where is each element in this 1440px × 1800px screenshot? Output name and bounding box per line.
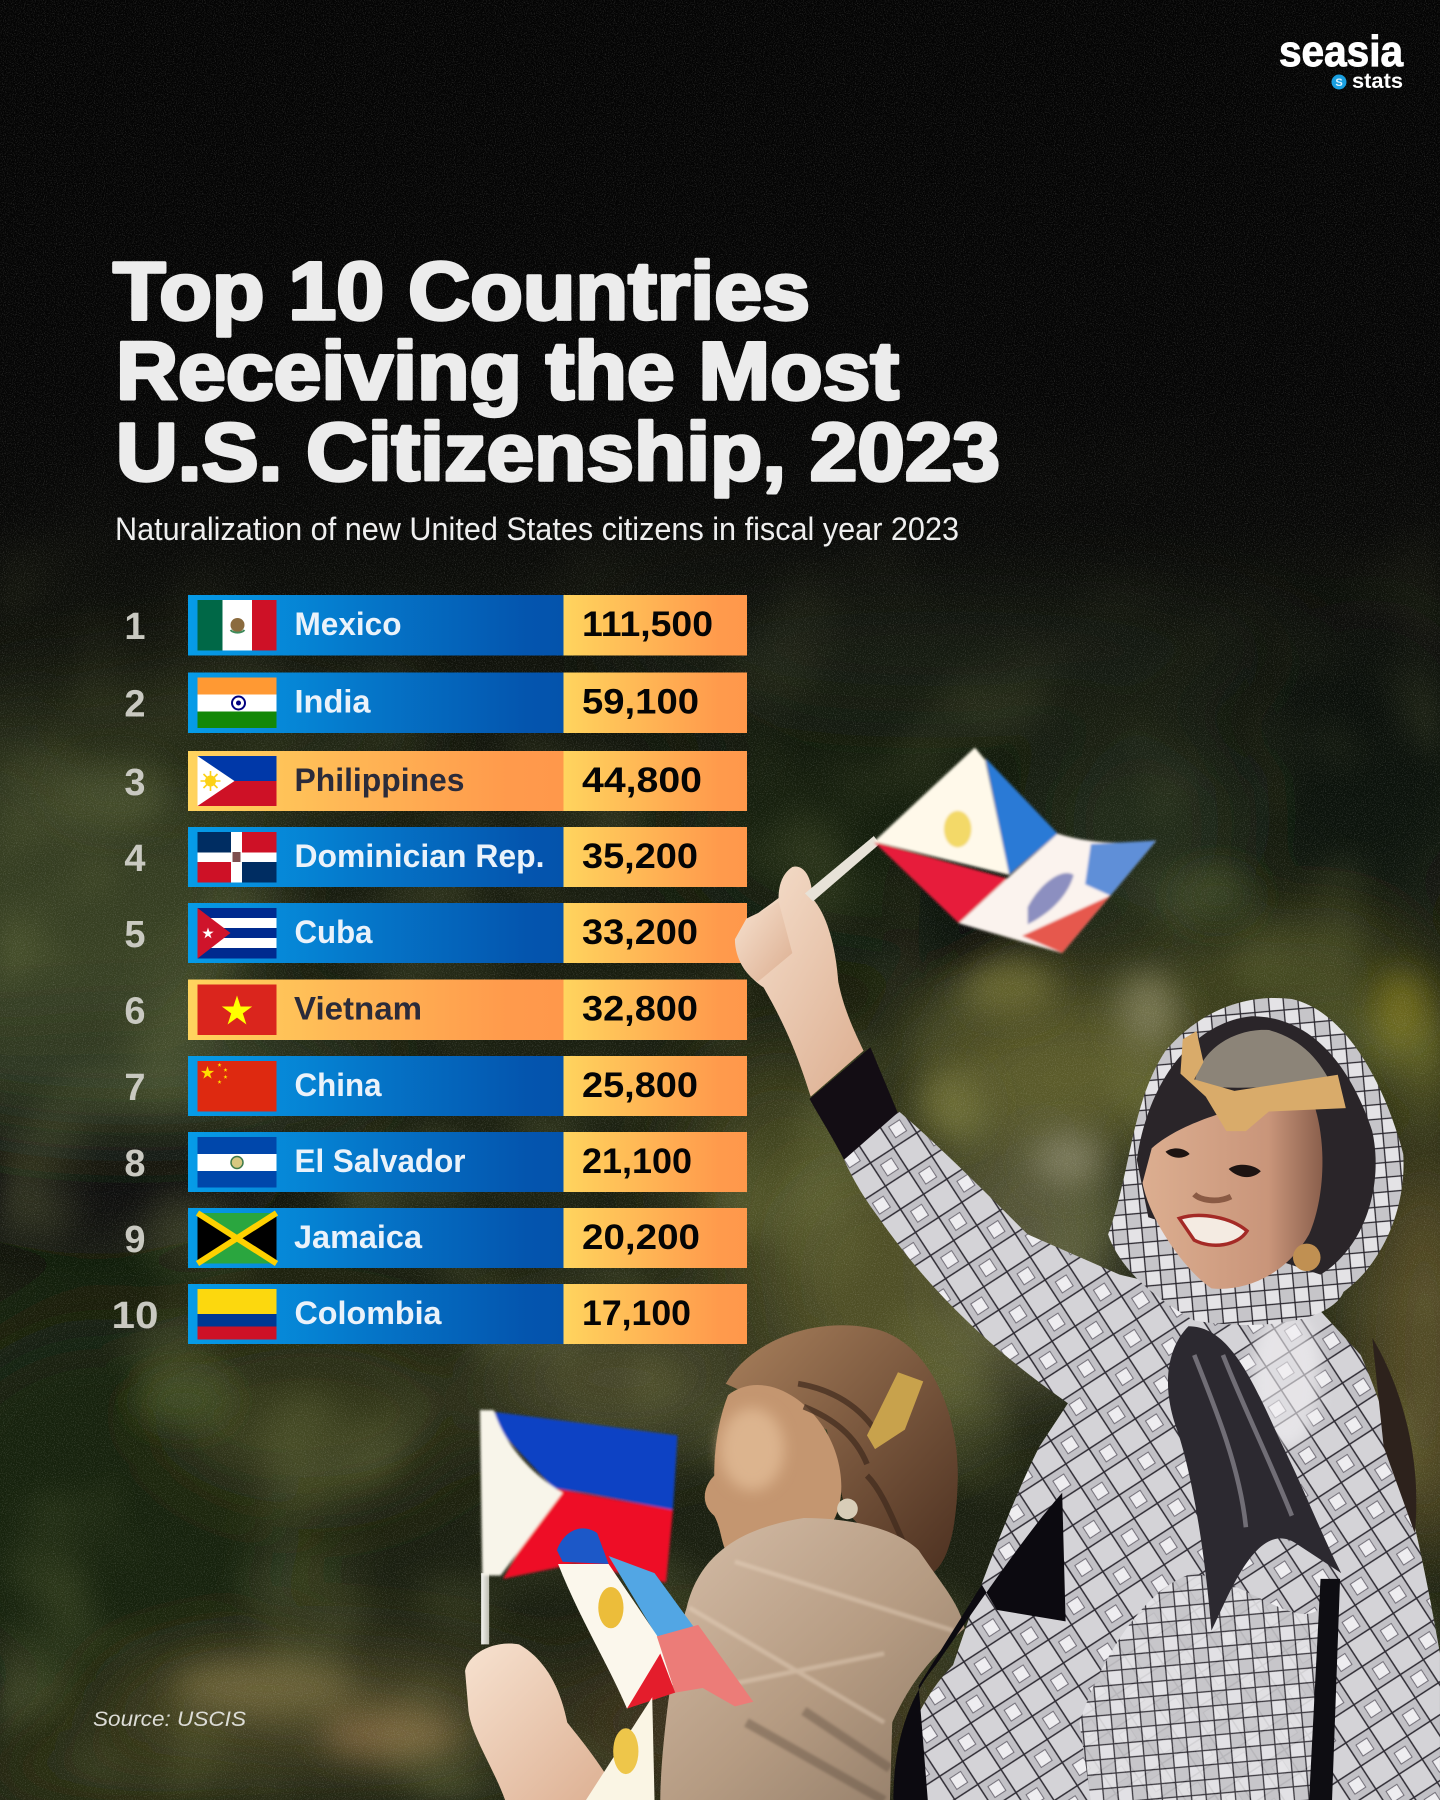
- row 6: Vietnam: [124, 980, 747, 1040]
- flag: Philippines: [198, 756, 276, 806]
- flag: Vietnam: [198, 984, 276, 1035]
- row 7: China: China: [294, 1067, 382, 1103]
- row 8: El Salvador: 8: [124, 1143, 146, 1185]
- row 7: China: 7: [124, 1067, 146, 1109]
- dress: [896, 1275, 1440, 1800]
- hair behind shoulder: [1372, 1338, 1416, 1533]
- row 7: China: 25,800: [582, 1066, 698, 1105]
- row 4: Dominican Rep.: 35,200: [582, 837, 698, 876]
- flag: El Salvador: [198, 1137, 276, 1188]
- row 2: India: India: [294, 684, 371, 720]
- row 6: Vietnam: Vietnam: [294, 990, 422, 1026]
- title: U.S. Citizenship, 2023: [116, 407, 1000, 498]
- logo: seasia stats: seasia: [1279, 27, 1403, 76]
- shawl: [660, 1518, 965, 1800]
- row 3: Philippines: [124, 751, 747, 811]
- row 5: Cuba: [124, 903, 747, 963]
- flag pole: [805, 836, 880, 901]
- face: [1143, 1100, 1322, 1289]
- dress light highlights: [1252, 1309, 1321, 1447]
- photo: foreground figures with flags: [465, 748, 1440, 1800]
- smile: [1179, 1215, 1247, 1245]
- Philippine flag, waved: [874, 748, 1156, 953]
- row 4: Dominican Rep.: 4: [124, 838, 146, 880]
- row 5: Cuba: Cuba: [294, 914, 373, 950]
- black cuff: [810, 1047, 899, 1160]
- row 2: India: [124, 672, 747, 733]
- flag: Mexico: [198, 600, 276, 650]
- title: [113, 246, 1000, 498]
- flag: Jamaica: [198, 1213, 276, 1264]
- row 4: Dominican Rep.: Dominician Rep.: [294, 838, 544, 874]
- eyes: [1166, 1148, 1261, 1177]
- photo: woman holding small flags, rear: [465, 1325, 965, 1800]
- row 10: Colombia: Colombia: [294, 1295, 442, 1331]
- row 7: China: [124, 1056, 747, 1116]
- logo icon: blue dot: S: [1335, 77, 1343, 89]
- title: Top 10 Countries: [113, 246, 810, 337]
- flag: India: [198, 678, 276, 728]
- headscarf: [1108, 998, 1404, 1325]
- row 6: Vietnam: 32,800: [582, 990, 698, 1028]
- ranked table: [112, 595, 747, 1344]
- hair clip: [867, 1372, 923, 1449]
- row 10: Colombia: [112, 1284, 747, 1344]
- dress lower light panel: [1079, 1573, 1321, 1800]
- row 3: Philippines: Philippines: [294, 762, 464, 798]
- hair under scarf: [1137, 1016, 1376, 1275]
- row 9: Jamaica: Jamaica: [294, 1219, 422, 1255]
- title: Receiving the Most: [116, 326, 899, 417]
- nose: [1194, 1194, 1231, 1200]
- flag: Colombia: [198, 1289, 276, 1340]
- row 9: Jamaica: 20,200: [582, 1218, 700, 1257]
- row 1: Mexico: Mexico: [294, 606, 402, 642]
- Philippine flag, third folded: [586, 1697, 655, 1800]
- gold head ornament: [1180, 1031, 1346, 1131]
- row 2: India: 2: [124, 684, 146, 726]
- photo: woman in patterned dress, waving flag: [735, 748, 1440, 1800]
- row 1: Mexico: 111,500: [582, 605, 713, 644]
- row 1: Mexico: 1: [124, 606, 146, 648]
- hair streaks: [798, 1384, 907, 1550]
- row 10: Colombia: 17,100: [582, 1294, 691, 1333]
- subtitle: Naturalization of new United States citizens in fiscal year 2023: [115, 511, 959, 547]
- flag: China: [198, 1061, 276, 1112]
- row 8: El Salvador: 21,100: [582, 1142, 692, 1181]
- scarf tails: [1168, 1326, 1341, 1631]
- Philippine flag, small front: [557, 1528, 753, 1800]
- row 3: Philippines: 3: [124, 762, 146, 804]
- hand: [465, 1643, 620, 1800]
- row 3: Philippines: 44,800: [582, 761, 702, 800]
- raised forearm and hand: [735, 866, 864, 1097]
- hair: [726, 1325, 958, 1575]
- source: Source: USCIS: [93, 1708, 246, 1731]
- row 1: Mexico: [124, 595, 747, 656]
- black wedge and trim: [893, 1493, 1066, 1800]
- flag: Cuba: [198, 908, 276, 958]
- row 2: India: 59,100: [582, 682, 699, 722]
- logo: seasia stats: stats: [1352, 70, 1403, 93]
- flag pole: [481, 1573, 489, 1644]
- face: [705, 1385, 841, 1567]
- black stripe: [1309, 1579, 1340, 1800]
- earring: [837, 1499, 858, 1519]
- row 9: Jamaica: [124, 1208, 747, 1268]
- row 4: Dominican Rep.: [124, 827, 747, 887]
- row 9: Jamaica: 9: [124, 1219, 146, 1261]
- flag: Dominican Republic: [198, 832, 276, 882]
- row 8: El Salvador: El Salvador: [294, 1143, 466, 1179]
- row 5: Cuba: 5: [124, 914, 146, 956]
- Philippine flag, large: [480, 1410, 677, 1582]
- row 10: Colombia: 10: [112, 1295, 158, 1337]
- row 5: Cuba: 33,200: [582, 913, 698, 952]
- hand overlapping row 5: [735, 901, 792, 982]
- row 8: El Salvador: [124, 1132, 747, 1192]
- earring: [1293, 1244, 1321, 1271]
- row 6: Vietnam: 6: [124, 990, 146, 1032]
- patterned sleeve: [844, 1112, 1127, 1403]
